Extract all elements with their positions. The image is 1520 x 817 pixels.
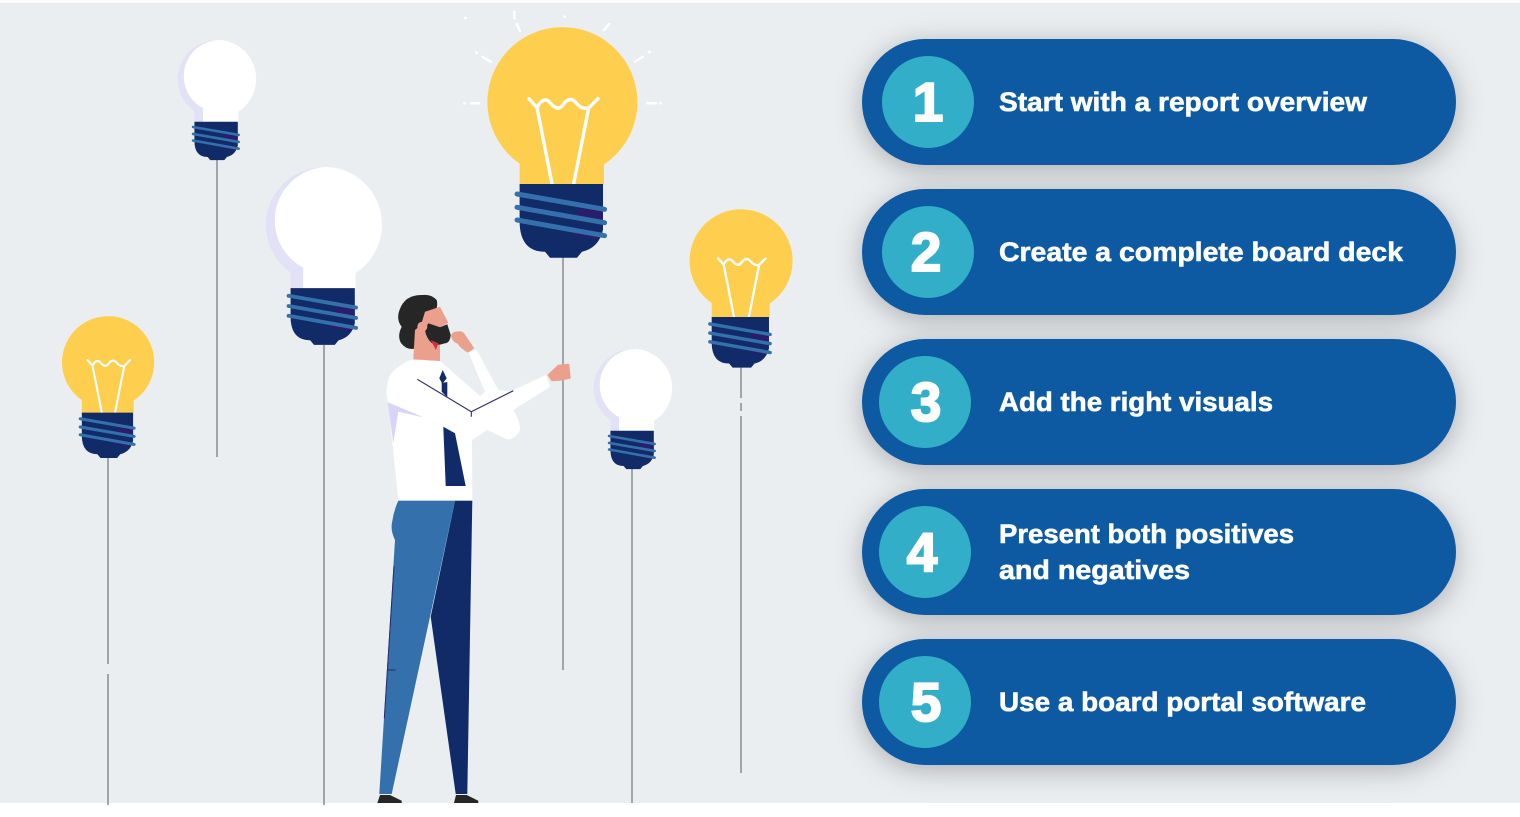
step 1: Start with a report overview	[999, 87, 1368, 117]
lightbulb: far left yellow	[62, 316, 154, 805]
step 5	[862, 639, 1456, 765]
shoes	[377, 795, 478, 803]
hand on stem	[548, 364, 570, 380]
step 1: 1	[913, 71, 943, 133]
step 3	[862, 339, 1456, 465]
hair	[398, 295, 437, 349]
step 2: 2	[911, 221, 941, 283]
man looking at lightbulbs	[377, 295, 570, 803]
lightbulb: large white	[266, 167, 382, 805]
lightbulb: upper left white	[178, 40, 256, 457]
step 2	[862, 189, 1456, 315]
step 1	[862, 39, 1456, 165]
hand on chin	[452, 332, 473, 352]
neck and face	[413, 307, 448, 361]
necktie	[439, 370, 466, 486]
ear	[417, 322, 427, 332]
step 4: Present both positives	[999, 519, 1294, 549]
step 2: Create a complete board deck	[999, 237, 1404, 267]
lightbulb: right yellow	[690, 209, 793, 773]
light rays	[464, 12, 661, 103]
lightbulb: large glowing yellow	[464, 12, 661, 670]
step 5: Use a board portal software	[999, 687, 1366, 717]
shirt fold lines	[417, 379, 513, 417]
collar accent	[431, 340, 438, 350]
shirt shadow	[388, 402, 423, 443]
step 4: and negatives	[999, 555, 1190, 585]
beard	[425, 323, 451, 345]
step 3: Add the right visuals	[999, 387, 1273, 417]
step 4: 4	[907, 521, 938, 583]
step 4	[862, 489, 1456, 615]
lightbulb: small white	[594, 349, 672, 803]
step 5: 5	[911, 671, 941, 733]
step 3: 3	[911, 371, 941, 433]
shirt	[387, 350, 550, 500]
trousers	[379, 501, 472, 794]
